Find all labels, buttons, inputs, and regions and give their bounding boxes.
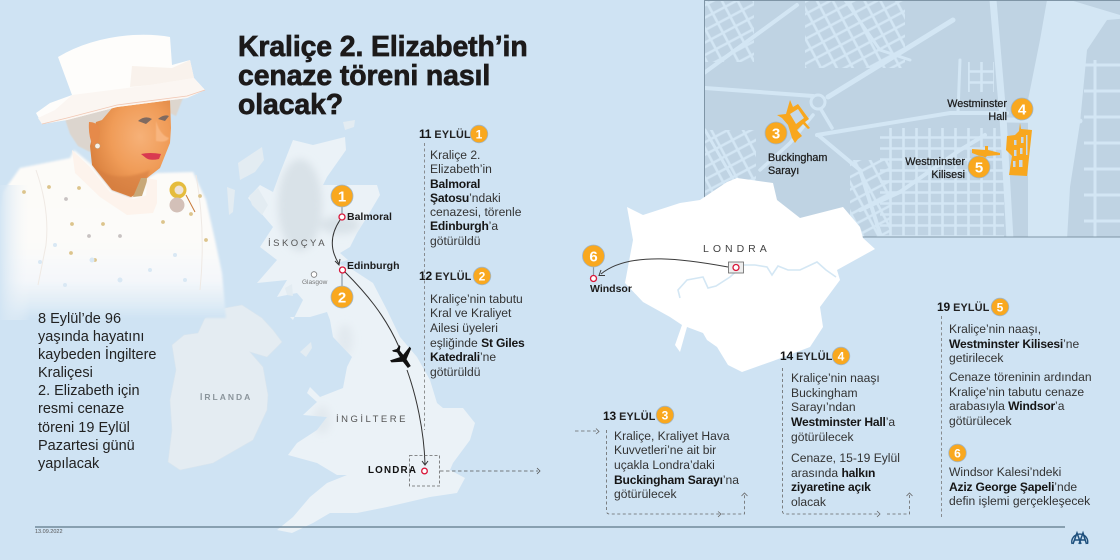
text: 11 September: cenazesi, törenle (430, 205, 521, 219)
text: 14 September: Kraliçe’nin naaşı (791, 371, 880, 385)
dashed connector: 14 September (782, 368, 912, 517)
text: public visit: Cenaze, 15-19 Eylül (791, 451, 900, 465)
text: 14 September: götürülecek (791, 430, 854, 444)
map label: Ireland: İRLANDA (200, 392, 252, 402)
map label: Buckingham Palace (768, 152, 827, 177)
main streets (704, 0, 1080, 240)
text: public visit: ziyaretine açık (791, 480, 871, 494)
title (238, 31, 528, 121)
text: public visit: olacak (791, 495, 826, 509)
map label: London: LONDRA (368, 465, 417, 476)
intro text: yaşında hayatını (38, 329, 144, 345)
text: 14 September: Buckingham (791, 386, 858, 400)
route: Edinburgh to London (345, 272, 428, 465)
text: 13 September: götürülecek (614, 487, 677, 501)
marker: Edinburgh (340, 267, 346, 290)
badge numerals: 1 (476, 128, 483, 142)
portrait: jacket (0, 150, 226, 318)
text: funeral procession (949, 370, 1092, 428)
portrait: eyes (138, 115, 169, 124)
title: cenaze töreni nasıl (238, 60, 490, 92)
London marker box (410, 456, 440, 486)
badge numerals: 3 (662, 408, 669, 422)
map label: Glasgow: Glasgow (302, 279, 327, 286)
date stamp: 13.09.2022 (35, 529, 63, 535)
text: 12 September: Kraliçe’nin tabutu (430, 292, 523, 306)
text: 19 September: Kraliçe’nin naaşı, (949, 322, 1041, 336)
intro text: 2. Elizabeth için (38, 383, 140, 399)
terrain: highland shading (278, 159, 360, 434)
text: 12 September: götürüldü (430, 365, 480, 379)
dashed connector: 19 September (940, 316, 942, 517)
text: 12 September: Kral ve Kraliyet (430, 306, 511, 320)
map: London inset (704, 0, 1120, 240)
badge numerals: 6 (954, 446, 961, 460)
intro text: töreni 19 Eylül (38, 420, 130, 436)
dashed connector: 11 and 12 September (424, 143, 426, 430)
text: 11 September (430, 148, 521, 248)
text: 11 September: Şatosu’ndaki (430, 191, 501, 205)
number badges (331, 98, 1033, 462)
text: funeral procession: arabasıyla Windsor’a (949, 399, 1064, 413)
inset frame (704, 0, 1120, 237)
date: 13 September: 13 EYLÜL (603, 409, 655, 423)
marker: central London box (728, 262, 744, 273)
badge numerals: 4 (838, 350, 845, 364)
map label: Buckingham Palace: Sarayı (768, 165, 799, 177)
logo: Anadolu Agency (1072, 533, 1088, 544)
text: burial (949, 465, 1090, 508)
footer rule (35, 526, 1065, 528)
text: 11 September: Edinburgh’a (430, 219, 498, 233)
text: 13 September: Kraliçe, Kraliyet Hava (614, 428, 730, 442)
text: funeral procession: Cenaze töreninin ardından (949, 370, 1092, 384)
map label: Westminster Hall (947, 98, 1007, 123)
portrait: brooch (170, 182, 195, 212)
map label: Westminster Hall: Westminster (947, 98, 1007, 110)
intro text: 8 Eylül’de 96 (38, 311, 121, 327)
text: 12 September: Katedrali’ne (430, 350, 496, 364)
date: 19 September: 19 EYLÜL (937, 300, 989, 314)
text: public visit (791, 451, 900, 509)
badge numerals: 6 (589, 248, 598, 266)
text: 11 September: Elizabeth’in (430, 162, 492, 176)
portrait: hat (36, 35, 205, 124)
portrait: lips (141, 153, 161, 160)
river Thames in Greater London (678, 262, 836, 298)
intro text: yapılacak (38, 456, 99, 472)
badge numerals: 3 (772, 126, 780, 142)
intro text: Pazartesi günü (38, 438, 135, 454)
portrait: nose shading (156, 121, 169, 142)
map label: Westminster Hall: Hall (988, 111, 1007, 123)
map: Greater London (625, 178, 875, 372)
portrait: jacket buttons (22, 185, 208, 262)
text: 13 September: uçakla Londra’daki (614, 458, 715, 472)
title: Kraliçe 2. Elizabeth’in (238, 31, 528, 63)
text: 11 September: Kraliçe 2. (430, 148, 480, 162)
text: 11 September: götürüldü (430, 234, 480, 248)
badge numerals: 2 (338, 290, 346, 306)
icon: airplane (386, 341, 419, 374)
text: 13 September (614, 428, 739, 501)
date: 12 September: 12 EYLÜL (419, 269, 471, 283)
text: burial: Windsor Kalesi’ndeki (949, 465, 1061, 479)
intro text: Kraliçesi (38, 365, 93, 381)
map label: Balmoral: Balmoral (347, 211, 392, 223)
portrait: earring (95, 143, 100, 149)
text: 12 September: eşliğinde St Giles (430, 336, 525, 350)
badge numerals: 4 (1018, 102, 1027, 118)
map label: Greater London: LONDRA (703, 243, 771, 255)
map label: Westminster Abbey: Kilisesi (931, 169, 965, 181)
text: 14 September: Westminster Hall’a (791, 415, 895, 429)
text: 19 September: Westminster Kilisesi’ne (949, 337, 1079, 351)
portrait: Queen Elizabeth II (0, 35, 226, 320)
map label: Windsor: Windsor (590, 283, 632, 295)
date: 14 September: 14 EYLÜL (780, 349, 832, 363)
text: 19 September (949, 322, 1079, 365)
intro text (38, 311, 156, 472)
title: olacak? (238, 89, 343, 121)
route: Balmoral to Edinburgh (332, 220, 340, 265)
text: 14 September (791, 371, 896, 444)
map label: Westminster Abbey: Westminster (905, 156, 965, 168)
text: 12 September: Ailesi üyeleri (430, 321, 498, 335)
badge numerals: 5 (975, 160, 983, 176)
intro text: resmi cenaze (38, 401, 124, 417)
text: 13 September: Kuvvetleri’ne ait bir (614, 443, 716, 457)
text: funeral procession: götürülecek (949, 414, 1012, 428)
dense street blocks (704, 0, 1120, 238)
river Thames (1028, 0, 1120, 240)
map label: Scotland: İSKOÇYA (268, 238, 327, 249)
portrait: pearl necklace (133, 178, 148, 197)
map label: England: İNGİLTERE (336, 414, 408, 425)
map: Great Britain and Ireland (168, 120, 475, 533)
portrait: ear (89, 122, 100, 146)
building: Palace of Westminster (1006, 123, 1032, 176)
text: 11 September: Balmoral (430, 177, 480, 191)
marker: Glasgow (311, 272, 317, 277)
text: 13 September: Buckingham Sarayı’na (614, 473, 739, 487)
land: Great Britain (248, 137, 475, 533)
date: 11 September: 11 EYLÜL (419, 127, 471, 141)
route: London to Windsor (599, 259, 728, 276)
text: burial: Aziz George Şapeli’nde (949, 480, 1077, 494)
terrain: islands (227, 120, 355, 357)
building: Buckingham Palace (777, 100, 810, 143)
badge numerals: 2 (479, 270, 486, 284)
building: Westminster Abbey (972, 146, 1000, 158)
dashed connector: 13 September (575, 428, 748, 517)
dashed arrow to London inset (440, 468, 540, 474)
marker: Windsor (590, 265, 596, 282)
map label: Buckingham Palace: Buckingham (768, 152, 827, 164)
portrait: neck and face (90, 100, 171, 197)
text: 12 September (430, 292, 525, 379)
portrait: speckled fade on jacket (38, 243, 187, 287)
portrait: hair (64, 106, 118, 152)
intro text: kaybeden İngiltere (38, 347, 156, 363)
text: 14 September: Sarayı’ndan (791, 400, 856, 414)
badge numerals: 1 (338, 188, 346, 206)
text: funeral procession: Kraliçe’nin tabutu cenaze (949, 385, 1084, 399)
portrait: jacket seams (36, 170, 202, 290)
text: burial: defin işlemi gerçekleşecek (949, 494, 1090, 508)
map label: Edinburgh: Edinburgh (347, 260, 400, 272)
text: 19 September: getirilecek (949, 351, 1003, 365)
text: public visit: arasında halkın (791, 466, 875, 480)
portrait: neck shading (92, 165, 150, 197)
marker: Balmoral (339, 205, 345, 220)
portrait: collar (72, 150, 157, 215)
badge numerals: 5 (997, 300, 1004, 314)
land: Ireland (168, 305, 282, 470)
marker: London (422, 468, 427, 474)
map label: Westminster Abbey (905, 156, 965, 181)
badge numerals (338, 102, 1027, 460)
